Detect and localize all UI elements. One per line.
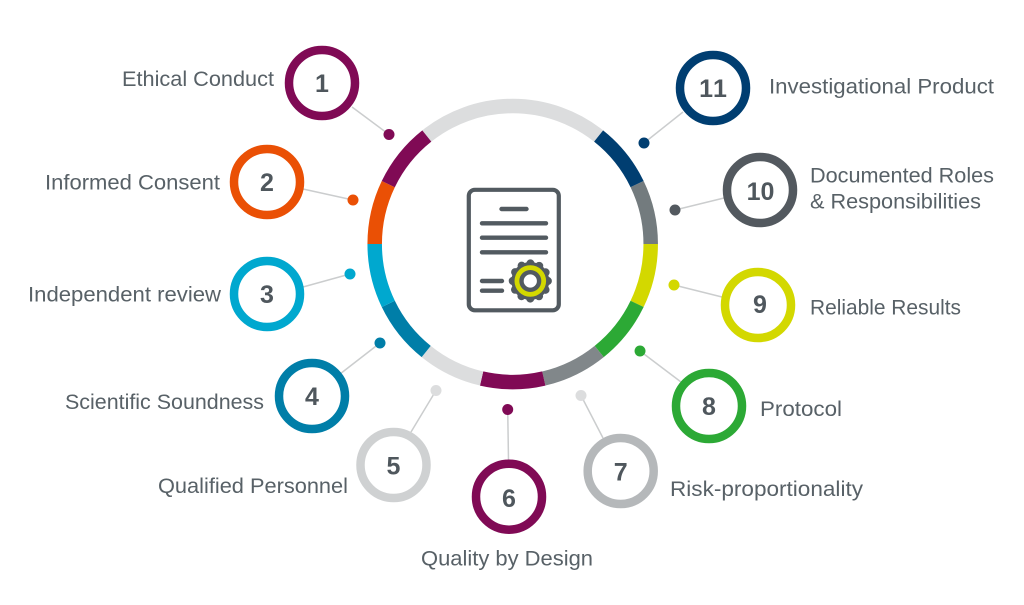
icon: certificate document with seal — [469, 190, 559, 310]
item 10: Documented Roles & Responsibilities: Documented Roles — [810, 164, 994, 188]
item 11: Investigational Product: Investigational Product — [769, 74, 994, 98]
item 10: Documented Roles & Responsibilities: 10 — [747, 178, 774, 206]
item 2: Informed Consent — [45, 149, 358, 215]
item 2: Informed Consent: Informed Consent — [45, 170, 220, 194]
item 1: Ethical Conduct — [122, 50, 394, 140]
item 1: Ethical Conduct: Ethical Conduct — [122, 67, 274, 91]
item 4: Scientific Soundness — [65, 338, 386, 429]
item 11: Investigational Product — [638, 55, 994, 148]
item 9: Reliable Results: 9 — [753, 291, 767, 319]
item 11: Investigational Product: 11 — [699, 75, 727, 103]
item 7: Risk-proportionality — [576, 390, 863, 504]
item 6: Quality by Design — [421, 404, 593, 570]
item 10: Documented Roles & Responsibilities — [670, 157, 994, 223]
item 4: Scientific Soundness: Scientific Soundness — [65, 390, 264, 414]
central segmented ring — [375, 106, 651, 382]
item 10: Documented Roles & Responsibilities: & Responsibilities — [810, 190, 981, 214]
item 6: Quality by Design: Quality by Design — [421, 546, 593, 570]
item 5: Qualified Personnel — [158, 385, 442, 498]
item 9: Reliable Results: Reliable Results — [810, 295, 961, 319]
item 3: Independent review: Independent review — [28, 283, 221, 307]
item 1: Ethical Conduct: 1 — [315, 70, 329, 98]
item 3: Independent review — [28, 261, 356, 327]
item 8: Protocol — [634, 346, 842, 439]
item 7: Risk-proportionality: 7 — [614, 458, 628, 486]
item 4: Scientific Soundness: 4 — [305, 383, 319, 411]
item 8: Protocol: Protocol — [760, 397, 842, 421]
item 6: Quality by Design: 6 — [502, 485, 516, 513]
item 9: Reliable Results — [668, 272, 961, 338]
item 5: Qualified Personnel: 5 — [387, 452, 401, 480]
item 3: Independent review: 3 — [260, 281, 274, 309]
item 2: Informed Consent: 2 — [260, 169, 274, 197]
item 8: Protocol: 8 — [702, 393, 716, 421]
item 7: Risk-proportionality: Risk-proportionality — [670, 477, 863, 501]
item 5: Qualified Personnel: Qualified Personnel — [158, 474, 348, 498]
